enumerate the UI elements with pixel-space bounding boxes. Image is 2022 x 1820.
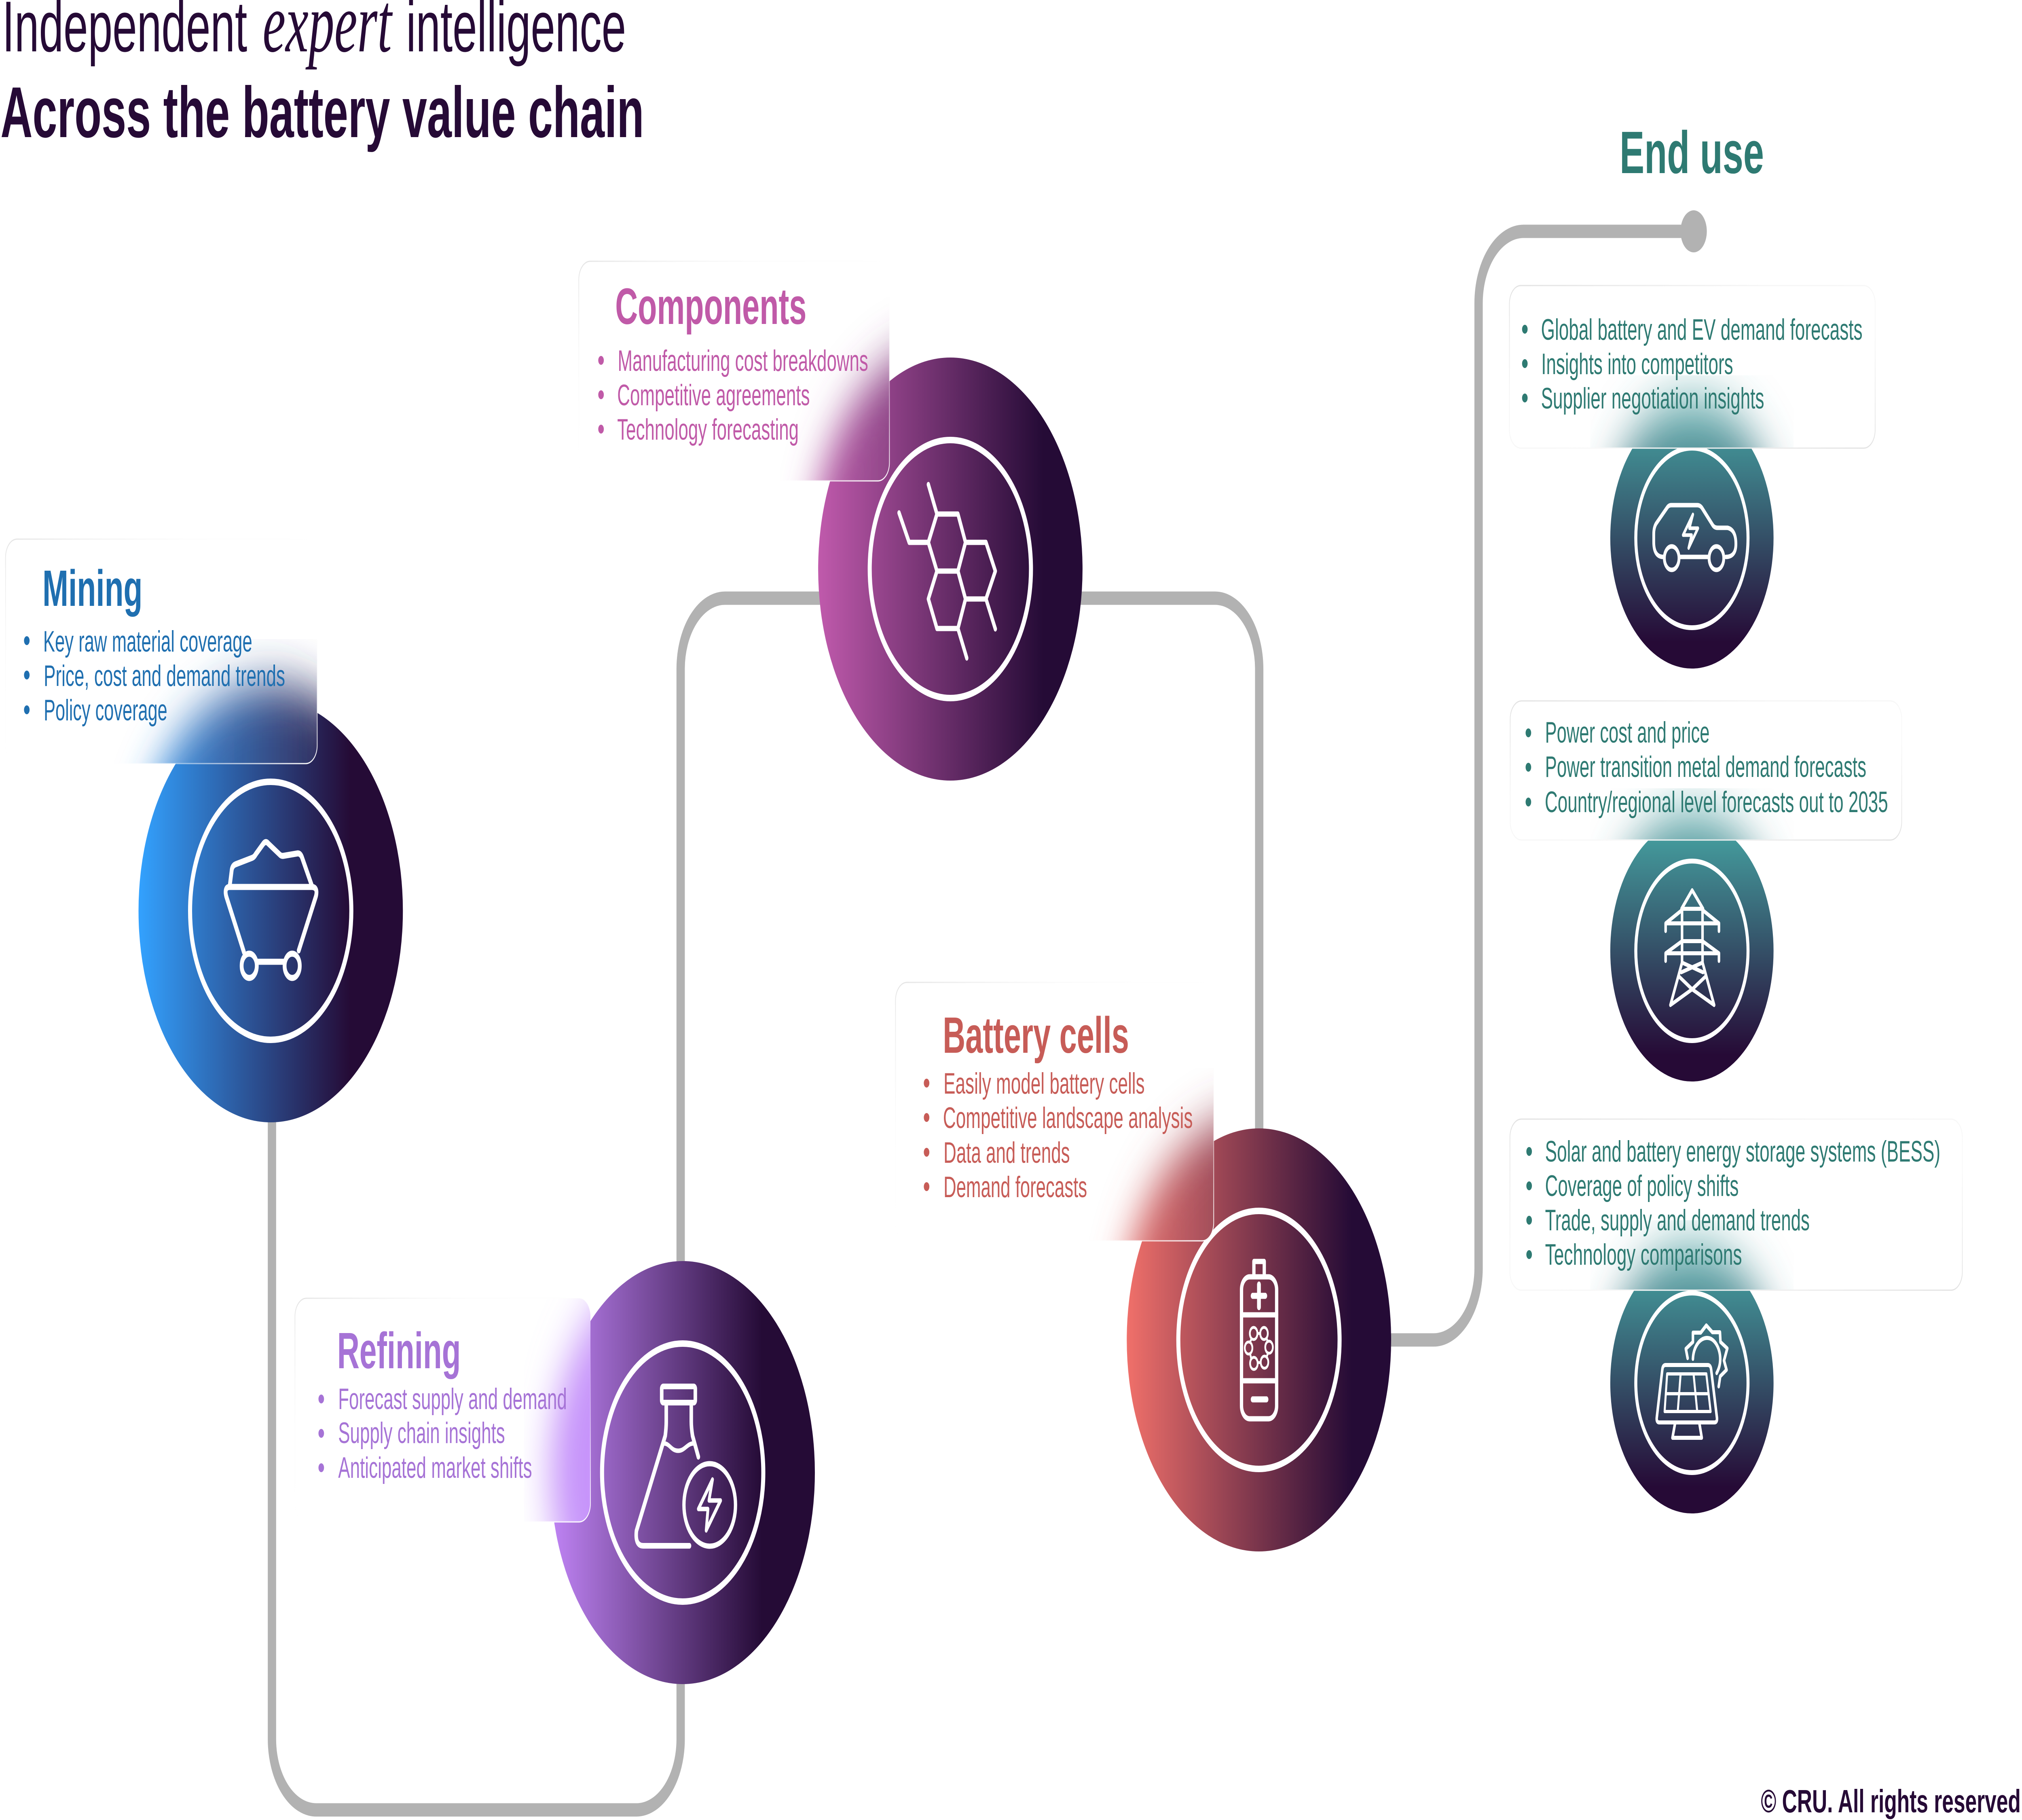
battery list: Data and trends — [943, 1136, 1070, 1169]
refining heading: Refining — [337, 1323, 461, 1380]
power node circle — [1610, 820, 1774, 1081]
battery list — [924, 1067, 1193, 1204]
battery heading: Battery cells — [943, 1007, 1129, 1064]
icon: flask with bolt — [602, 1344, 764, 1602]
panel: end use power — [1510, 701, 1901, 1086]
components list: Manufacturing cost breakdowns — [618, 344, 868, 377]
solar list: Solar and battery energy storage systems (BESS) — [1545, 1135, 1940, 1168]
power list: Power transition metal demand forecasts — [1545, 750, 1866, 783]
components list: Competitive agreements — [617, 379, 810, 412]
mining list — [24, 625, 285, 727]
battery card — [895, 982, 1400, 1566]
components list: Technology forecasting — [617, 413, 799, 446]
solar list: Coverage of policy shifts — [1545, 1169, 1739, 1202]
panel: end use EV — [1509, 286, 1875, 673]
footer: copyright: © CRU. All rights reserved — [1761, 1784, 2021, 1820]
power list: Country/regional level forecasts out to 2035 — [1545, 785, 1888, 819]
battery node circle — [1127, 1128, 1391, 1551]
power list — [1525, 716, 1888, 819]
refining list: Anticipated market shifts — [338, 1451, 532, 1484]
icon: solar panel and sun — [1636, 1293, 1748, 1473]
title: Across the battery value chain — [0, 72, 644, 152]
title — [0, 0, 644, 152]
components card — [579, 261, 1092, 796]
mining node circle — [138, 699, 403, 1122]
icon: mine cart — [190, 782, 351, 1040]
refining list: Forecast supply and demand — [338, 1382, 567, 1416]
panel: end use solar — [1510, 1119, 1962, 1518]
components heading: Components — [615, 278, 806, 335]
mining list: Policy coverage — [44, 694, 167, 727]
solar list: Technology comparisons — [1545, 1238, 1742, 1271]
mining list: Price, cost and demand trends — [44, 659, 285, 692]
solar card — [1510, 1119, 1962, 1518]
refining node circle — [550, 1261, 815, 1684]
solar list — [1526, 1135, 1940, 1271]
battery list: Easily model battery cells — [943, 1067, 1145, 1100]
EV list: Insights into competitors — [1541, 347, 1733, 381]
EV list: Supplier negotiation insights — [1541, 382, 1764, 415]
icon: electric car — [1636, 448, 1748, 628]
panel: mining — [6, 539, 412, 1137]
solar list: Trade, supply and demand trends — [1545, 1204, 1810, 1237]
power card — [1510, 701, 1901, 1086]
icon: hexagon molecule — [870, 440, 1031, 698]
panel: battery cells — [895, 982, 1400, 1566]
battery list: Demand forecasts — [943, 1170, 1087, 1204]
heading: end use: End use — [1620, 119, 1764, 186]
EV list — [1522, 313, 1863, 415]
components node circle — [818, 358, 1083, 781]
refining card — [294, 1297, 591, 1522]
components list — [598, 344, 868, 446]
EV node circle — [1610, 407, 1774, 669]
mining card — [5, 539, 318, 764]
mining heading: Mining — [42, 560, 142, 617]
icon: electricity pylon — [1636, 861, 1748, 1041]
solar node circle — [1610, 1252, 1774, 1513]
power list: Power cost and price — [1545, 716, 1709, 749]
refining list: Supply chain insights — [338, 1416, 505, 1450]
connector line: value chain path — [272, 210, 1707, 1810]
panel: refining — [295, 1261, 815, 1684]
refining list — [319, 1382, 567, 1484]
panel: components — [579, 261, 1092, 796]
mining list: Key raw material coverage — [43, 625, 252, 658]
EV list: Global battery and EV demand forecasts — [1541, 313, 1863, 346]
battery list: Competitive landscape analysis — [943, 1101, 1193, 1134]
EV card — [1509, 286, 1875, 673]
icon: battery — [1178, 1211, 1339, 1469]
